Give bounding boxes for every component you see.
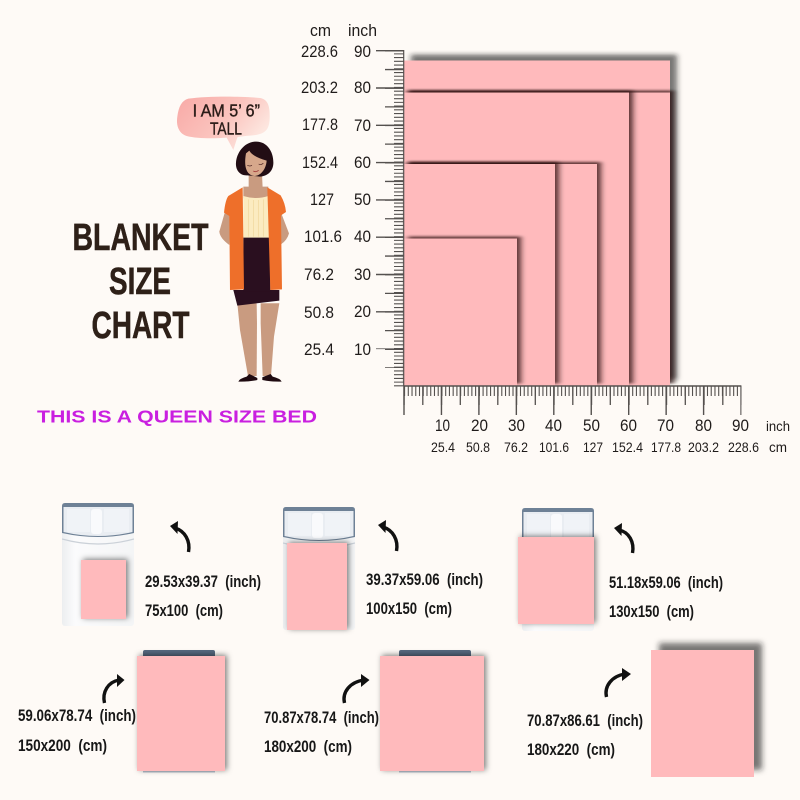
label 130x150	[609, 574, 723, 621]
bed 130x150	[518, 508, 594, 631]
horizontal axis labels: 152.4	[612, 439, 643, 455]
bed 180x200	[380, 650, 484, 772]
horizontal axis labels: 101.6	[539, 439, 569, 455]
label 100x150: 39.37x59.06 (inch)	[366, 571, 483, 589]
arrow 180x220	[606, 668, 631, 697]
horizontal axis labels: cm	[769, 439, 787, 455]
size chart rectangles	[404, 60, 670, 386]
label 100x150: 100x150 (cm)	[366, 600, 452, 618]
label 75x100	[145, 573, 261, 620]
title	[72, 217, 208, 347]
horizontal axis labels: 50.8	[466, 439, 490, 455]
vertical axis labels: inch	[348, 22, 377, 40]
horizontal axis labels: 177.8	[651, 439, 681, 455]
vertical axis labels: 177.8	[302, 116, 338, 134]
vertical axis labels: cm	[310, 22, 331, 40]
vertical axis labels: 20	[354, 303, 371, 321]
horizontal axis labels: 30	[508, 417, 525, 435]
horizontal axis labels: 228.6	[728, 439, 759, 455]
horizontal axis labels: 127	[583, 439, 603, 455]
queen size note: THIS IS A QUEEN SIZE BED	[37, 406, 317, 426]
horizontal axis labels	[431, 417, 790, 455]
label 150x200	[18, 707, 136, 755]
vertical axis labels: 25.4	[304, 341, 334, 359]
horizontal axis labels: 90	[732, 417, 749, 435]
label 180x220: 70.87x86.61 (inch)	[527, 712, 643, 730]
horizontal axis labels: inch	[766, 418, 790, 434]
vertical axis labels: 101.6	[304, 228, 342, 246]
label 75x100: 75x100 (cm)	[145, 602, 223, 620]
vertical axis labels: 80	[354, 79, 371, 97]
vertical axis labels	[301, 22, 377, 359]
horizontal axis labels: 76.2	[504, 439, 528, 455]
vertical axis labels: 50	[354, 191, 371, 209]
label 180x200	[264, 709, 379, 756]
arrow 180x200	[344, 674, 370, 703]
horizontal axis labels: 50	[583, 417, 600, 435]
speech bubble: TALL	[210, 118, 242, 138]
vertical axis labels: 40	[354, 228, 371, 246]
label 100x150	[366, 571, 483, 618]
vertical axis labels: 228.6	[301, 43, 338, 61]
arrow 150x200	[104, 674, 124, 703]
title: SIZE	[109, 261, 171, 303]
vertical axis labels: 10	[354, 341, 371, 359]
vertical axis labels: 127	[310, 191, 334, 209]
label 180x220: 180x220 (cm)	[527, 741, 615, 759]
label 130x150: 51.18x59.06 (inch)	[609, 574, 723, 592]
bed 75x100	[62, 503, 134, 626]
illustration: woman	[219, 142, 289, 382]
label 150x200: 59.06x78.74 (inch)	[18, 707, 136, 725]
vertical axis labels: 60	[354, 154, 371, 172]
title: BLANKET	[72, 217, 208, 259]
horizontal axis labels: 20	[471, 417, 488, 435]
label 180x200: 180x200 (cm)	[264, 738, 352, 756]
horizontal axis labels: 40	[545, 417, 562, 435]
vertical axis labels: 70	[354, 117, 371, 135]
label 75x100: 29.53x39.37 (inch)	[145, 573, 261, 591]
horizontal axis labels: 70	[657, 417, 674, 435]
title: CHART	[92, 305, 190, 347]
label 130x150: 130x150 (cm)	[609, 603, 694, 621]
label 180x220	[527, 712, 643, 759]
vertical axis labels: 76.2	[304, 266, 334, 284]
horizontal axis labels: 25.4	[431, 439, 455, 455]
arrow 75x100	[170, 521, 189, 552]
blanket 180x220	[651, 650, 754, 777]
speech bubble	[177, 97, 270, 150]
vertical axis labels: 203.2	[301, 79, 338, 97]
speech bubble: I AM 5’ 6”	[193, 101, 260, 121]
horizontal axis labels: 80	[695, 417, 712, 435]
horizontal axis labels: 60	[620, 417, 637, 435]
label 150x200: 150x200 (cm)	[18, 737, 107, 755]
vertical axis labels: 30	[354, 266, 371, 284]
horizontal axis labels: 203.2	[688, 439, 719, 455]
bed 100x150	[283, 507, 355, 630]
vertical axis labels: 152.4	[302, 154, 338, 172]
vertical axis labels: 90	[354, 43, 371, 61]
arrow 100x150	[378, 520, 397, 551]
arrow 130x150	[614, 523, 633, 553]
horizontal ruler	[403, 386, 741, 400]
horizontal axis labels: 10	[435, 417, 450, 435]
vertical axis labels: 50.8	[304, 304, 334, 322]
vertical ruler	[390, 50, 404, 386]
bed 150x200	[137, 650, 225, 772]
label 180x200: 70.87x78.74 (inch)	[264, 709, 379, 727]
